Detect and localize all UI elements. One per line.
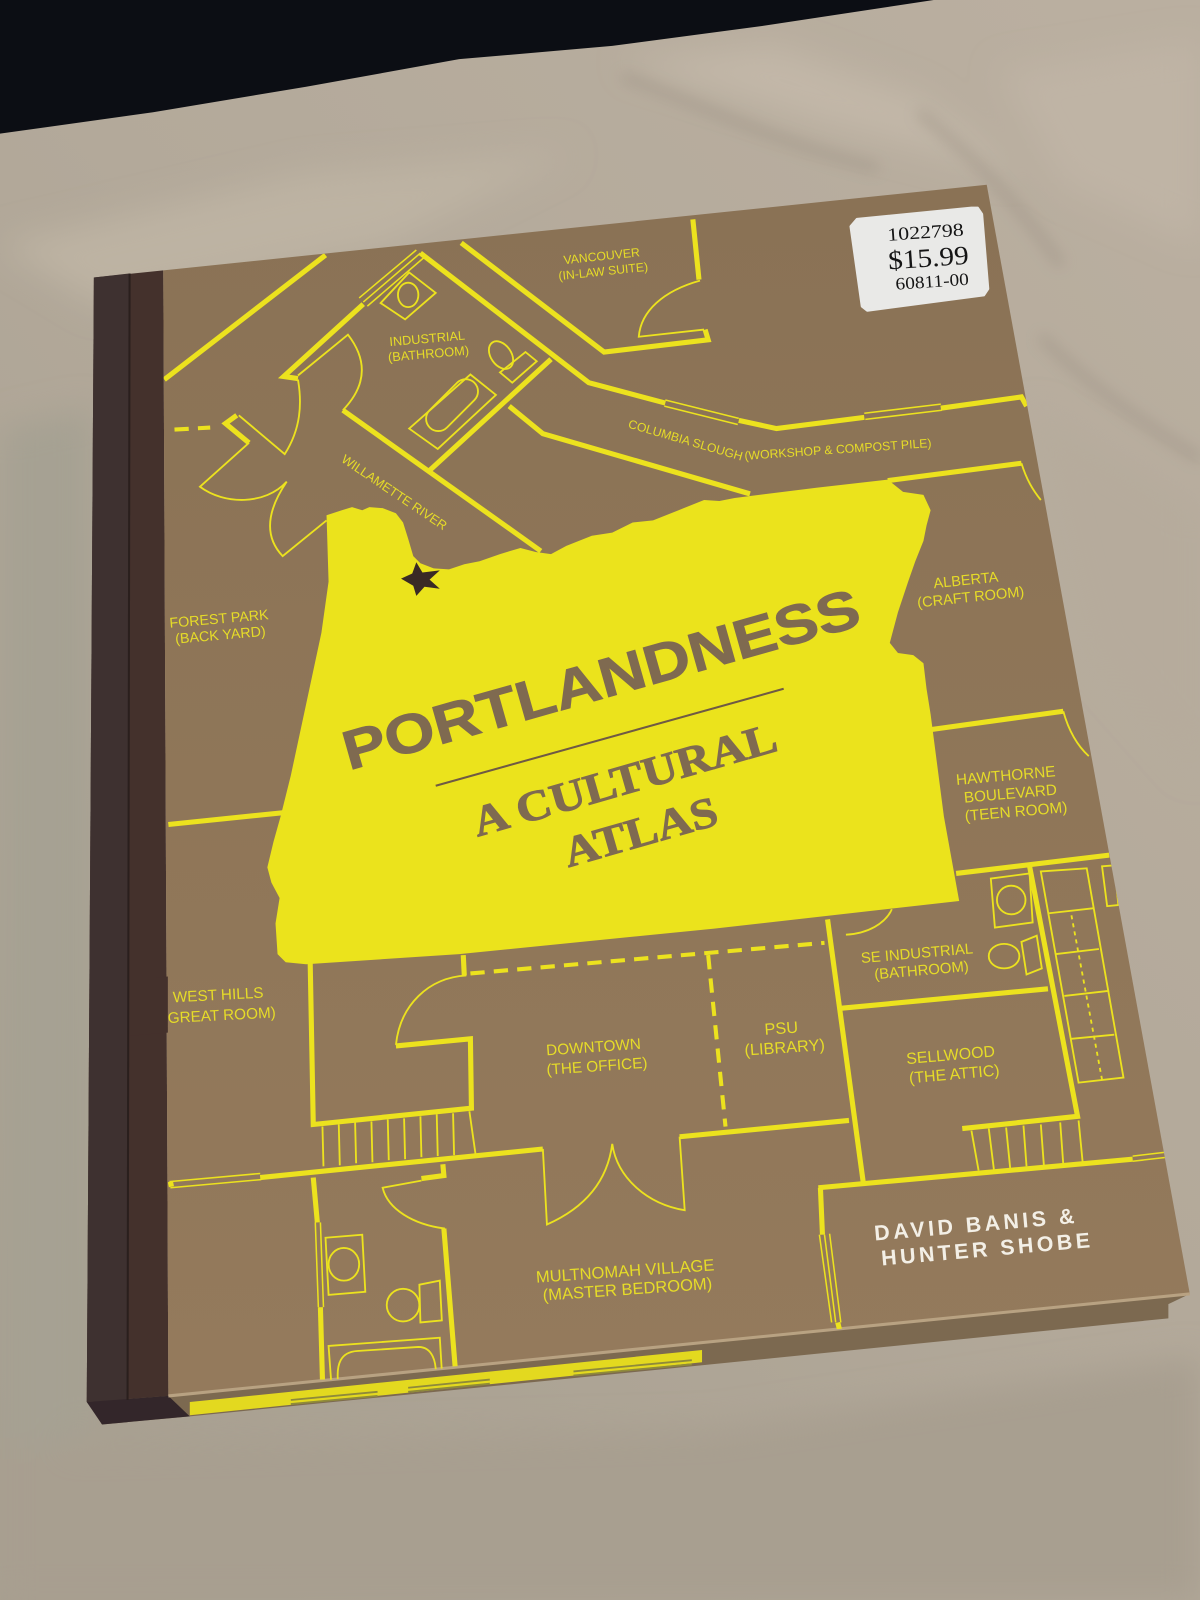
price sticker: 60811-00 [895,270,969,294]
price sticker: 1022798 [887,220,964,245]
label: Sellwood: (THE ATTIC) [908,1062,1000,1087]
label: Forest Park: (BACK YARD) [175,624,266,648]
label: Industrial: (BATHROOM) [387,343,470,365]
subtitle: A Cultural: A CULTURAL [467,715,782,846]
spine overlap covering clipped label [130,977,168,1036]
price sticker: $15.99 [887,240,970,275]
subtitle: Atlas: ATLAS [558,788,723,877]
label: West Hills: (GREAT ROOM) [162,1004,276,1027]
label: Industrial: INDUSTRIAL [389,328,466,349]
thick walls [164,219,1133,1380]
label: PSU: (LIBRARY) [744,1036,825,1060]
back cover and page edge [87,1294,1190,1424]
label: Vancouver: (IN-LAW SUITE) [558,260,649,283]
floor plan lines [164,219,1168,1388]
label: Multnomah Village: (MASTER BEDROOM) [542,1274,713,1305]
label: Forest Park: FOREST PARK [169,607,270,632]
title: PORTLANDNESS: PORTLANDNESS [335,577,867,782]
black fabric, top left [0,0,934,134]
front cover board [163,185,1190,1396]
Oregon state silhouette [267,480,959,964]
label: Hawthorne Boulevard: HAWTHORNE [955,763,1056,789]
closet shelves [1041,865,1123,1083]
doors [200,281,1089,1229]
label: Hawthorne Boulevard: BOULEVARD [963,782,1058,807]
book spine [87,270,190,1424]
label: SE Industrial: SE INDUSTRIAL [860,941,974,967]
label: SE Industrial: (BATHROOM) [874,959,969,983]
label: Alberta: ALBERTA [933,570,999,592]
label: Downtown: DOWNTOWN [546,1036,641,1059]
price sticker [851,208,988,310]
label: Vancouver: VANCOUVER [563,245,641,267]
star marking Portland [401,562,440,596]
authors: DAVID BANIS & [873,1204,1079,1246]
title rule [436,689,784,786]
label: PSU: PSU [764,1019,799,1039]
windows [169,250,1168,1322]
label: Sellwood: SELLWOOD [906,1043,996,1068]
dashed walls [174,428,824,1127]
label: West Hills: WEST HILLS [172,985,264,1006]
label: Downtown: (THE OFFICE) [546,1055,648,1079]
yellow strip on back cover [190,1350,702,1415]
label: Alberta: (CRAFT ROOM) [917,584,1025,611]
label: Willamette River: WILLAMETTE RIVER [339,451,450,533]
fixtures [326,272,1042,1388]
label: Hawthorne Boulevard: (TEEN ROOM) [964,799,1068,825]
room labels [162,245,1068,1305]
label: Columbia Slough: COLUMBIA SLOUGH (WORKSHOP & COMPOST PILE) [629,420,931,462]
stairs [322,1111,1083,1170]
authors: HUNTER SHOBE [880,1228,1094,1271]
label: Multnomah Village: MULTNOMAH VILLAGE [535,1255,715,1287]
